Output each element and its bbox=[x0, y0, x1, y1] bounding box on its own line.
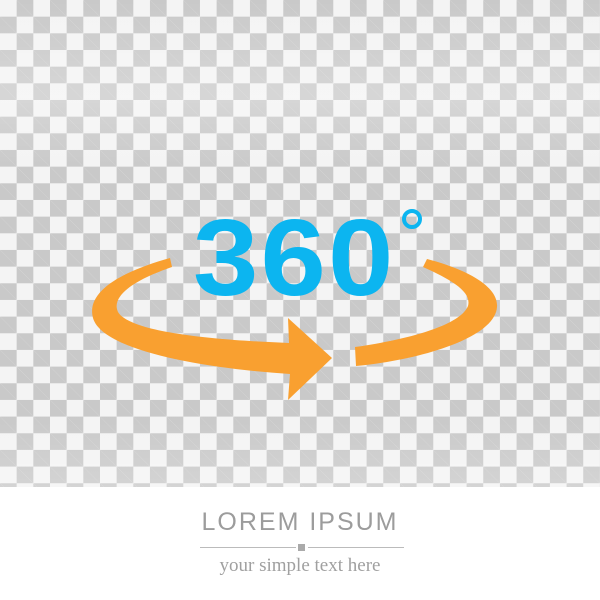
divider with square bbox=[200, 544, 404, 551]
subtitle text: your simple text here bbox=[220, 555, 380, 576]
text: 360: 360 bbox=[193, 197, 395, 318]
icon: degree symbol bbox=[404, 211, 420, 227]
title: LOREM IPSUM: LOREM IPSUM bbox=[201, 508, 399, 536]
arrow: left arc with arrowhead bbox=[92, 258, 332, 400]
arrow: right arc segment bbox=[355, 259, 497, 366]
